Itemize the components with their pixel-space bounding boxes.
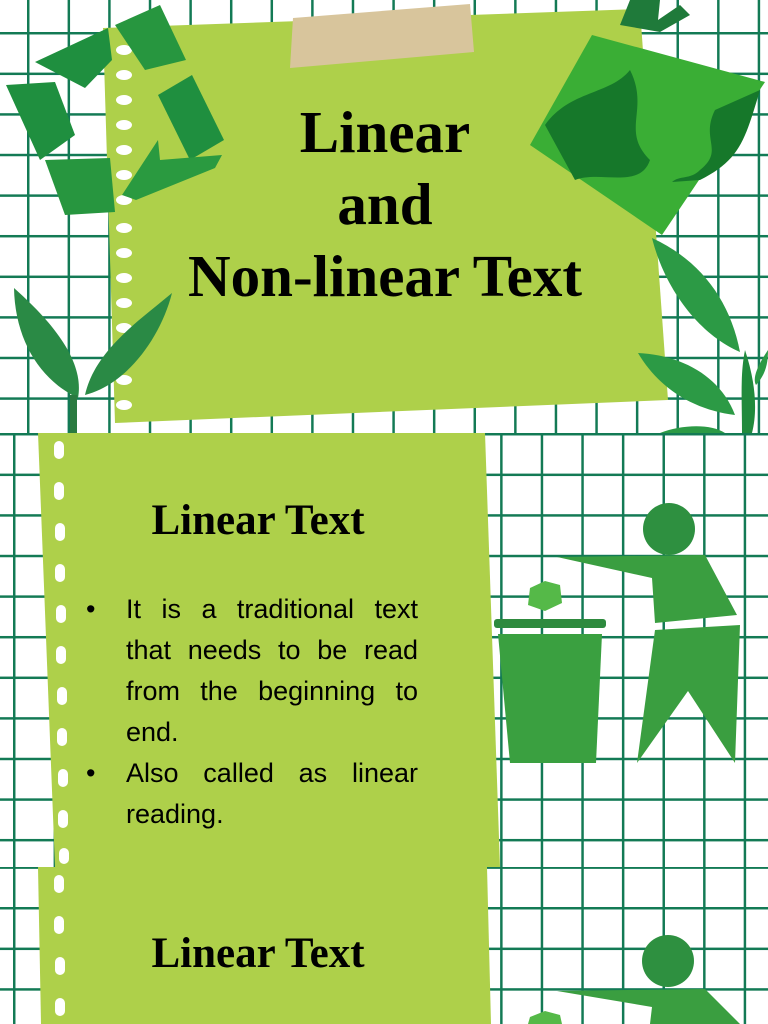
- bullet list: [86, 594, 418, 829]
- title: [188, 99, 582, 309]
- icon: person throwing trash in bin: [494, 503, 740, 763]
- bullet 1: [86, 594, 418, 747]
- paper: linear text card: [38, 433, 500, 867]
- icon: leaves bottom-left: [14, 288, 172, 433]
- title: and: [337, 171, 433, 237]
- bullet 2: •: [86, 758, 95, 788]
- paper holes: [54, 875, 65, 1016]
- bullet 2: [86, 758, 418, 829]
- icon: person figure partial: [528, 935, 740, 1024]
- bullet 2: Also called as linear: [126, 758, 418, 788]
- heading: Linear Text: Linear Text: [151, 497, 365, 544]
- icon: globe: [530, 0, 765, 235]
- bullet 2: reading.: [126, 799, 224, 829]
- tape: [290, 4, 474, 68]
- paper holes: [116, 45, 132, 410]
- slide 1: title: [0, 0, 768, 433]
- icon: leaves right: [638, 238, 768, 433]
- bullet 1: It is a traditional text: [126, 594, 418, 624]
- bullet 1: from the beginning to: [126, 676, 418, 706]
- bullet 1: that needs to be read: [126, 635, 418, 665]
- slide 2: linear text: [0, 433, 768, 867]
- icon: recycle arrows: [6, 5, 224, 215]
- title: Linear: [300, 99, 470, 165]
- title: Non-linear Text: [188, 243, 582, 309]
- paper: title card: [103, 9, 668, 423]
- paper holes: [54, 441, 69, 864]
- bullet 1: •: [86, 594, 95, 624]
- bullet 1: end.: [126, 717, 179, 747]
- heading: Linear Text: Linear Text: [151, 930, 365, 977]
- paper: second card: [38, 867, 491, 1024]
- slide 3: linear text (repeat): [0, 867, 768, 1024]
